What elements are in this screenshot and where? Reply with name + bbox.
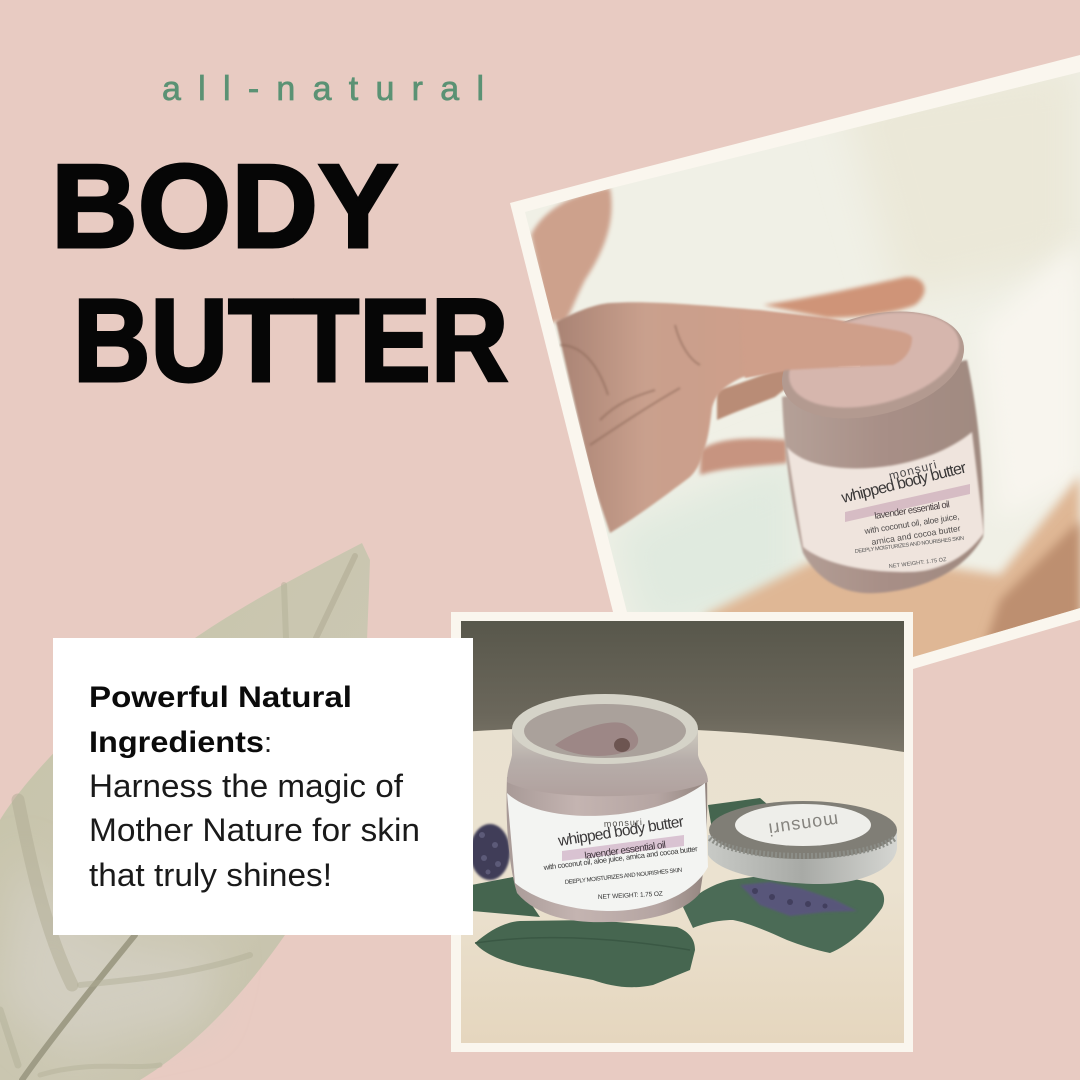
jar label: DEEPLY MOISTURIZES AND NOURISHES SKIN <box>855 536 964 555</box>
wood slice <box>461 727 904 1043</box>
front leaf <box>475 920 695 987</box>
square photo: jar with lid and eucalyptus <box>451 612 913 1052</box>
jar label: with coconut oil, aloe juice, <box>863 511 960 536</box>
lid: monsuri <box>766 810 840 840</box>
rotated photo: hand touching jar <box>500 50 1080 710</box>
eyebrow: all-natural: all-natural <box>162 70 484 108</box>
body copy <box>89 727 420 893</box>
lavender sprig <box>740 882 857 916</box>
photo frame <box>451 612 913 1052</box>
body copy: Harness the magic of <box>89 768 403 804</box>
jar label <box>787 432 984 572</box>
jar label: lavender essential oil <box>874 499 951 522</box>
jar label: monsuri <box>604 817 643 829</box>
jar label: DEEPLY MOISTURIZES AND NOURISHES SKIN <box>565 868 683 886</box>
watercolor leaf <box>0 543 370 1080</box>
heading: Powerful Natural Ingredients: Powerful Natural <box>89 681 352 714</box>
title: BODY BUTTER <box>51 141 508 406</box>
jar label: NET WEIGHT: 1.75 OZ <box>598 891 663 901</box>
left leaf <box>473 877 540 917</box>
jar label: whipped body butter <box>839 459 969 507</box>
jar <box>771 294 984 593</box>
jar label: arnica and cocoa butter <box>871 523 961 547</box>
jar label: monsuri <box>887 457 939 483</box>
jar label: whipped body butter <box>556 813 685 850</box>
jar rim and cream <box>782 312 964 417</box>
backdrop <box>461 621 904 756</box>
title: BODY BUTTER: BODY <box>51 141 398 273</box>
photo frame <box>510 55 1080 669</box>
jar label: NET WEIGHT: 1.75 OZ <box>889 557 947 570</box>
blurred background <box>526 72 1080 657</box>
body copy: that truly shines! <box>89 857 332 893</box>
jar label: with coconut oil, aloe juice, arnica and cocoa butter <box>542 844 699 872</box>
title: BODY BUTTER: BUTTER <box>73 274 508 406</box>
hand <box>531 188 925 533</box>
heading: Powerful Natural Ingredients: Ingredients <box>89 726 264 759</box>
text panel: powerful natural ingredients <box>53 638 473 935</box>
glass jar <box>507 694 708 922</box>
pointing finger on top of jar <box>744 321 912 379</box>
heading: Powerful Natural Ingredients <box>89 681 352 759</box>
left lavender <box>470 824 510 880</box>
body copy: Mother Nature for skin <box>89 812 420 848</box>
body copy: : <box>264 727 272 759</box>
jar label <box>507 783 708 911</box>
jar label: lavender essential oil <box>584 840 667 862</box>
right leaf <box>683 875 884 953</box>
leaf behind lid <box>708 798 766 824</box>
lid <box>708 801 897 884</box>
